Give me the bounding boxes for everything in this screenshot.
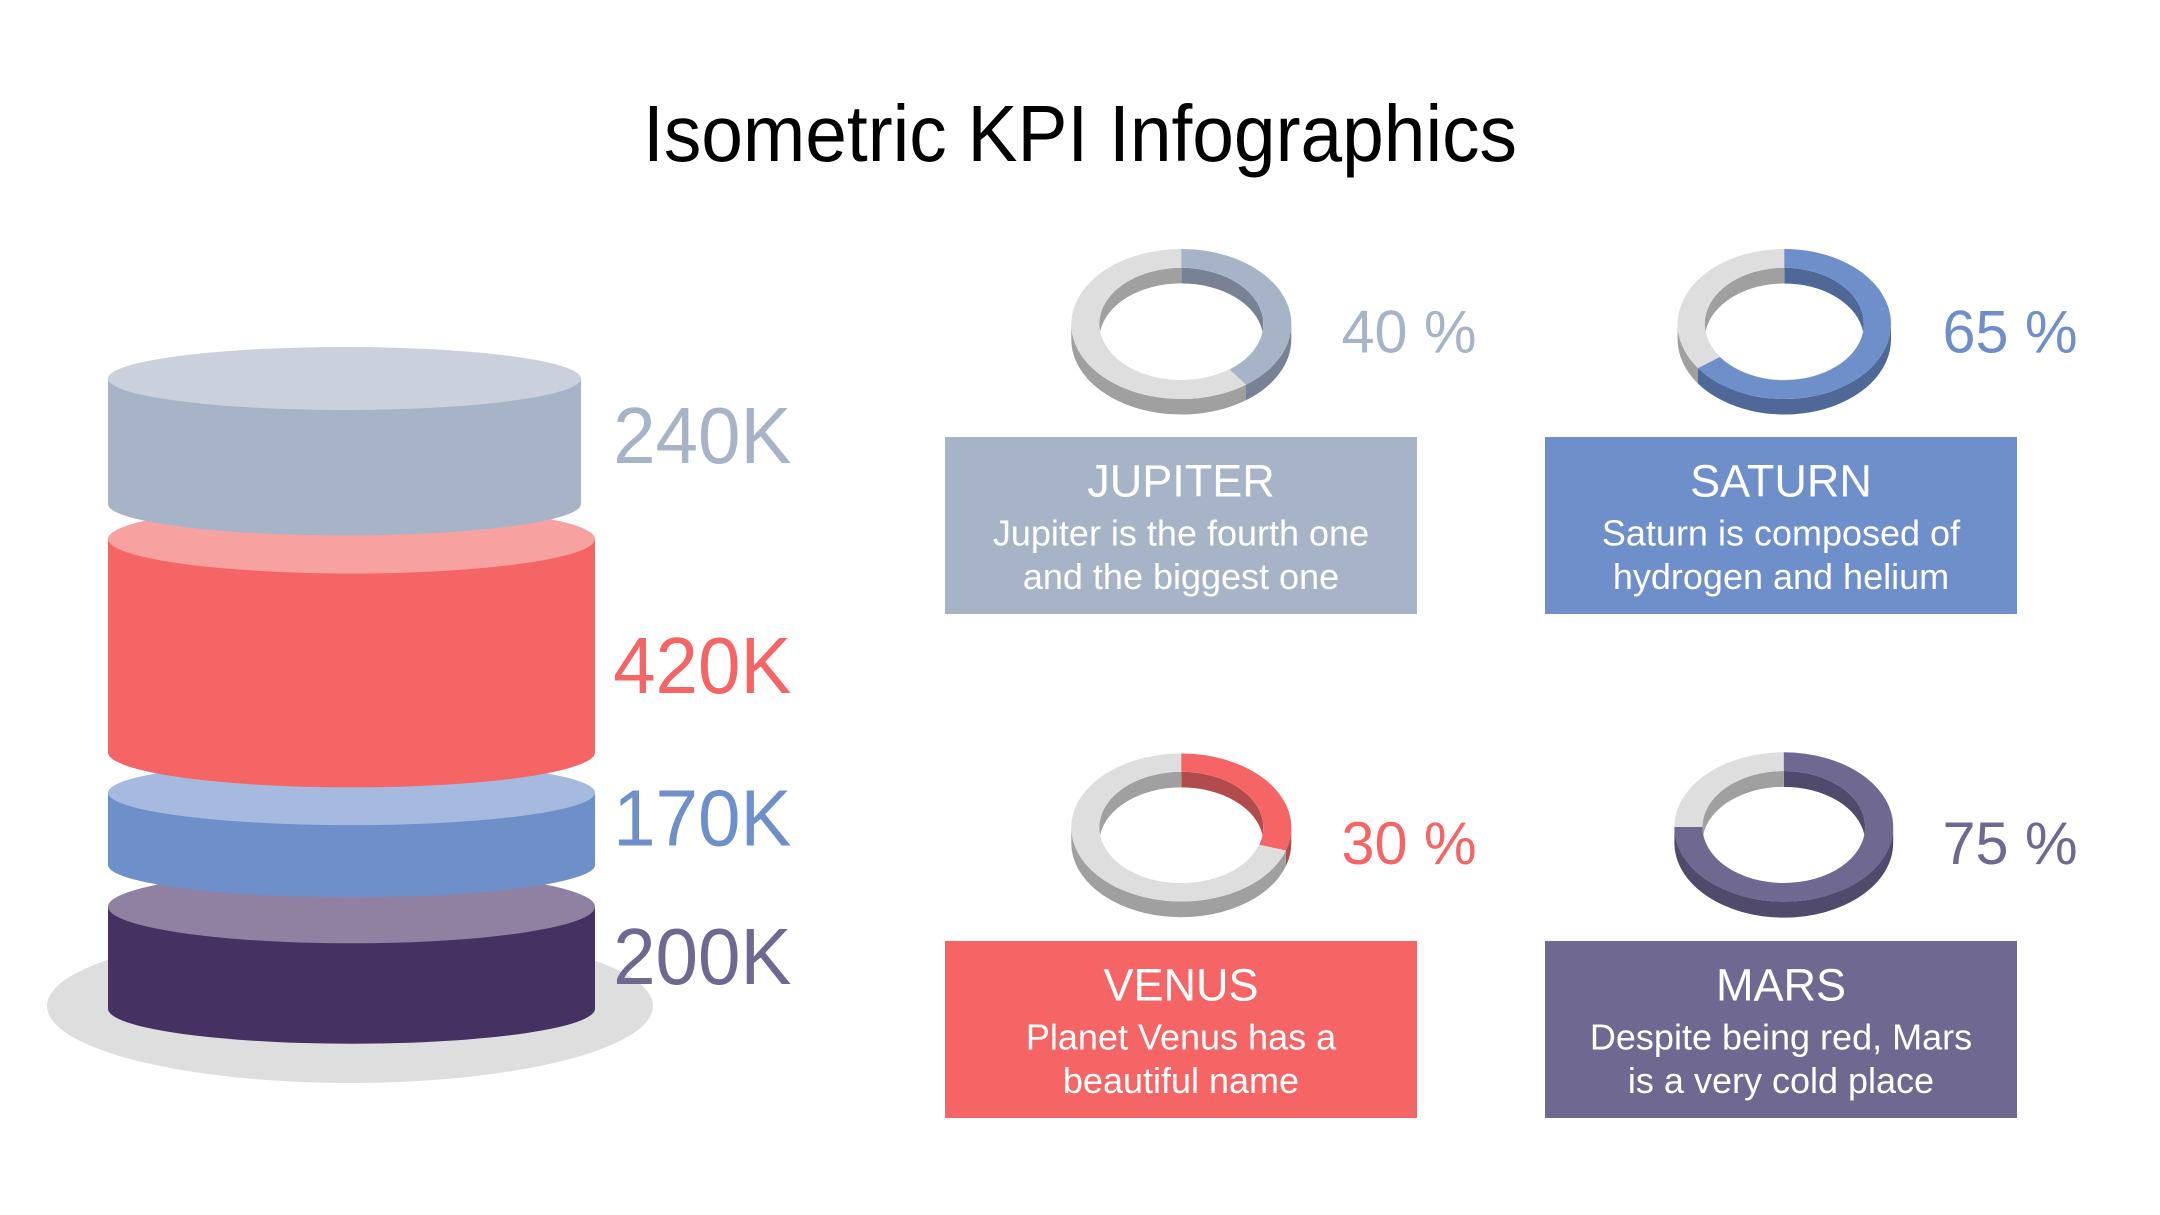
card: Mars: Despite being red, Mars (1590, 1016, 1972, 1058)
card: Venus: beautiful name (1063, 1060, 1299, 1101)
card: Saturn (1545, 437, 2017, 614)
panel: Mars (1545, 752, 2078, 1118)
panel: Saturn (1545, 249, 2078, 614)
stack ground shadow (47, 929, 653, 1083)
card: Jupiter: and the biggest one (1023, 556, 1339, 597)
card: Venus: VENUS (1103, 960, 1259, 1010)
card: Saturn: Saturn is composed of (1602, 512, 1961, 554)
cylinder: 200K layer (108, 870, 595, 1044)
cylinder: 240K layer (108, 347, 581, 535)
card: Venus: Planet Venus has a (1026, 1016, 1337, 1058)
label: 200K: 200K (613, 912, 792, 1001)
label: 420K: 420K (613, 621, 792, 710)
donut: Venus 30% (1071, 754, 1291, 917)
donut: Mars 75% (1674, 752, 1893, 918)
card: Jupiter (945, 437, 1417, 614)
card: Saturn: hydrogen and helium (1613, 556, 1949, 597)
percentage: 40 %: 40 % (1341, 298, 1477, 366)
donut: Jupiter 40% (1071, 249, 1291, 415)
panel: Jupiter (945, 249, 1477, 614)
percentage: 30 %: 30 % (1341, 809, 1477, 877)
card: Mars (1545, 941, 2017, 1118)
label: 170K: 170K (613, 773, 792, 863)
cylinder: 170K layer (108, 760, 595, 897)
panel: Venus (945, 754, 1477, 1118)
card: Jupiter: JUPITER (1087, 456, 1275, 506)
percentage: 75 %: 75 % (1942, 809, 2078, 877)
donut: Saturn 65% (1678, 249, 1891, 414)
chart: isometric cylinder stack (47, 347, 653, 1083)
card: Venus (945, 941, 1417, 1118)
title: Isometric KPI Infographics (643, 90, 1517, 178)
percentage: 65 %: 65 % (1942, 298, 2078, 366)
card: Saturn: SATURN (1690, 456, 1872, 506)
card: Jupiter: Jupiter is the fourth one (993, 512, 1369, 554)
card: Mars: is a very cold place (1628, 1060, 1934, 1101)
label: 240K: 240K (613, 391, 792, 480)
cylinder: 420K layer (108, 504, 595, 787)
card: Mars: MARS (1716, 960, 1846, 1010)
